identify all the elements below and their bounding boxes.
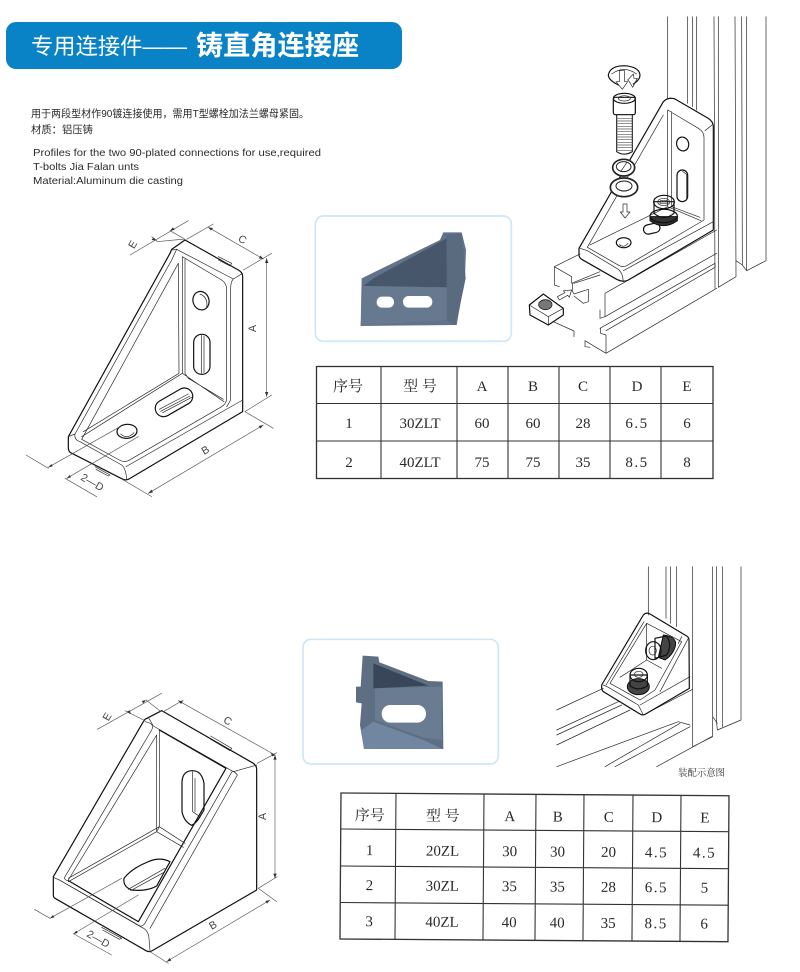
technical drawing: bracket with dimensions, lower xyxy=(34,693,277,963)
profile rails xyxy=(557,567,741,767)
socket head screw xyxy=(613,93,635,154)
insertion arrow icon xyxy=(557,290,572,300)
chinese description: 用于两段型材作90镀连接使用，需用T型螺栓加法兰螺母紧固。 xyxy=(31,107,309,120)
table row 1: 20 xyxy=(601,845,616,861)
dimension lines: B xyxy=(199,444,212,458)
dimension lines: A xyxy=(257,812,269,820)
english bolts line: T-bolts Jia Falan unts xyxy=(33,161,139,173)
rotation arrow icon xyxy=(608,66,640,89)
banner title: 铸直角连接座 xyxy=(196,31,359,61)
bracket with bolts xyxy=(602,613,690,715)
assembly caption: 装配示意图 xyxy=(678,767,725,779)
dimension lines xyxy=(26,221,273,497)
table row 1: 1 xyxy=(366,843,373,859)
table row 2 xyxy=(366,878,708,897)
table row 1: 30ZLT xyxy=(399,416,441,432)
dimension lines: C xyxy=(236,233,249,247)
spring washer xyxy=(613,159,635,176)
table row 1: 30 xyxy=(550,844,565,861)
table header row: D xyxy=(632,379,643,395)
table row 1: 20ZL xyxy=(426,844,459,860)
english description: Profiles for the two 90-plated connections for use,required xyxy=(33,147,321,159)
table row 2: 40ZLT xyxy=(399,455,441,471)
table row 3 xyxy=(365,914,708,933)
banner subtitle: 专用连接件—— xyxy=(31,34,187,59)
table row 3: 40ZL xyxy=(425,915,459,931)
table row 1: 28 xyxy=(576,416,590,432)
chinese material: 材质：铝压铸 xyxy=(31,123,93,136)
english material line: Material:Aluminum die casting xyxy=(33,175,183,187)
table header row xyxy=(333,377,692,395)
table row 2: 8 xyxy=(683,455,691,471)
photo panel: upper bracket xyxy=(315,216,511,341)
dimension lines: 2—D xyxy=(84,928,112,951)
table row 1: 4.5 xyxy=(645,845,668,861)
table header row: C xyxy=(578,379,588,395)
dimension lines: 2—D xyxy=(78,472,106,494)
table header row: E xyxy=(700,811,709,827)
table header row: 序号 xyxy=(333,378,363,395)
table row 2: 35 xyxy=(502,879,517,895)
table row 3: 3 xyxy=(365,914,373,930)
t-nut xyxy=(529,294,563,325)
table row 1 xyxy=(366,843,716,862)
flat washer xyxy=(610,178,638,197)
table row 2: 28 xyxy=(601,880,616,896)
table row 2: 2 xyxy=(345,455,353,471)
vertical slot xyxy=(182,771,204,825)
table row 1: 60 xyxy=(474,416,490,432)
table header row: B xyxy=(553,809,563,826)
aluminium profile xyxy=(553,17,766,353)
header banner xyxy=(6,22,402,69)
table row 2: 75 xyxy=(474,455,490,471)
down arrow icon xyxy=(620,204,630,218)
table row 2: 35 xyxy=(576,455,590,471)
lower bolt xyxy=(627,668,649,695)
technical drawing: bracket with dimensions, upper xyxy=(26,221,273,497)
installed bolt xyxy=(643,195,677,235)
table row 2: 2 xyxy=(366,878,373,894)
table row 2: 75 xyxy=(526,455,540,471)
table row 3: 40 xyxy=(502,915,517,931)
table row 1: 6.5 xyxy=(625,416,649,432)
table row 2: 8.5 xyxy=(625,455,649,471)
table header row: D xyxy=(651,810,662,826)
dimension lines: A xyxy=(247,324,259,332)
upper bolt xyxy=(646,635,676,660)
table header row: 型 号 xyxy=(426,807,460,825)
table row 1: 6 xyxy=(683,416,691,432)
table header row: A xyxy=(477,379,488,395)
dimension lines: C xyxy=(221,714,234,729)
bracket xyxy=(579,98,713,282)
table header row: B xyxy=(528,379,538,395)
table header row: A xyxy=(504,809,515,825)
table header row: 序号 xyxy=(355,807,385,824)
dimension lines: E xyxy=(126,239,140,251)
dimension lines: B xyxy=(207,919,219,933)
table header row: 型 号 xyxy=(403,377,437,395)
horizontal slot xyxy=(124,859,170,890)
table header row xyxy=(355,806,709,827)
table row 2: 35 xyxy=(550,879,565,896)
dimension lines xyxy=(34,693,277,963)
description text block xyxy=(31,107,321,187)
table row 3: 40 xyxy=(550,915,565,932)
table row 2: 30ZL xyxy=(426,879,459,895)
table row 1 xyxy=(345,416,691,432)
table row 1: 4.5 xyxy=(693,845,716,862)
photo panel: lower bracket xyxy=(303,639,498,764)
assembly drawing: upper, exploded xyxy=(529,17,766,353)
specification table: upper xyxy=(316,366,713,478)
table row 2 xyxy=(345,455,691,471)
bracket photo xyxy=(356,656,443,749)
table row 3: 6 xyxy=(700,917,708,933)
table row 2: 5 xyxy=(701,881,708,897)
table row 3: 35 xyxy=(601,916,616,932)
assembly drawing: lower xyxy=(557,567,741,767)
table row 1: 60 xyxy=(526,416,540,432)
table header row: C xyxy=(604,810,614,826)
table row 2: 6.5 xyxy=(645,880,668,896)
table header row: E xyxy=(682,379,692,395)
specification table: lower xyxy=(340,793,729,942)
table row 3: 8.5 xyxy=(644,916,668,932)
table row 1: 1 xyxy=(345,416,353,432)
bracket photo xyxy=(361,232,466,326)
dimension lines: E xyxy=(101,711,114,723)
table row 1: 30 xyxy=(502,844,517,860)
